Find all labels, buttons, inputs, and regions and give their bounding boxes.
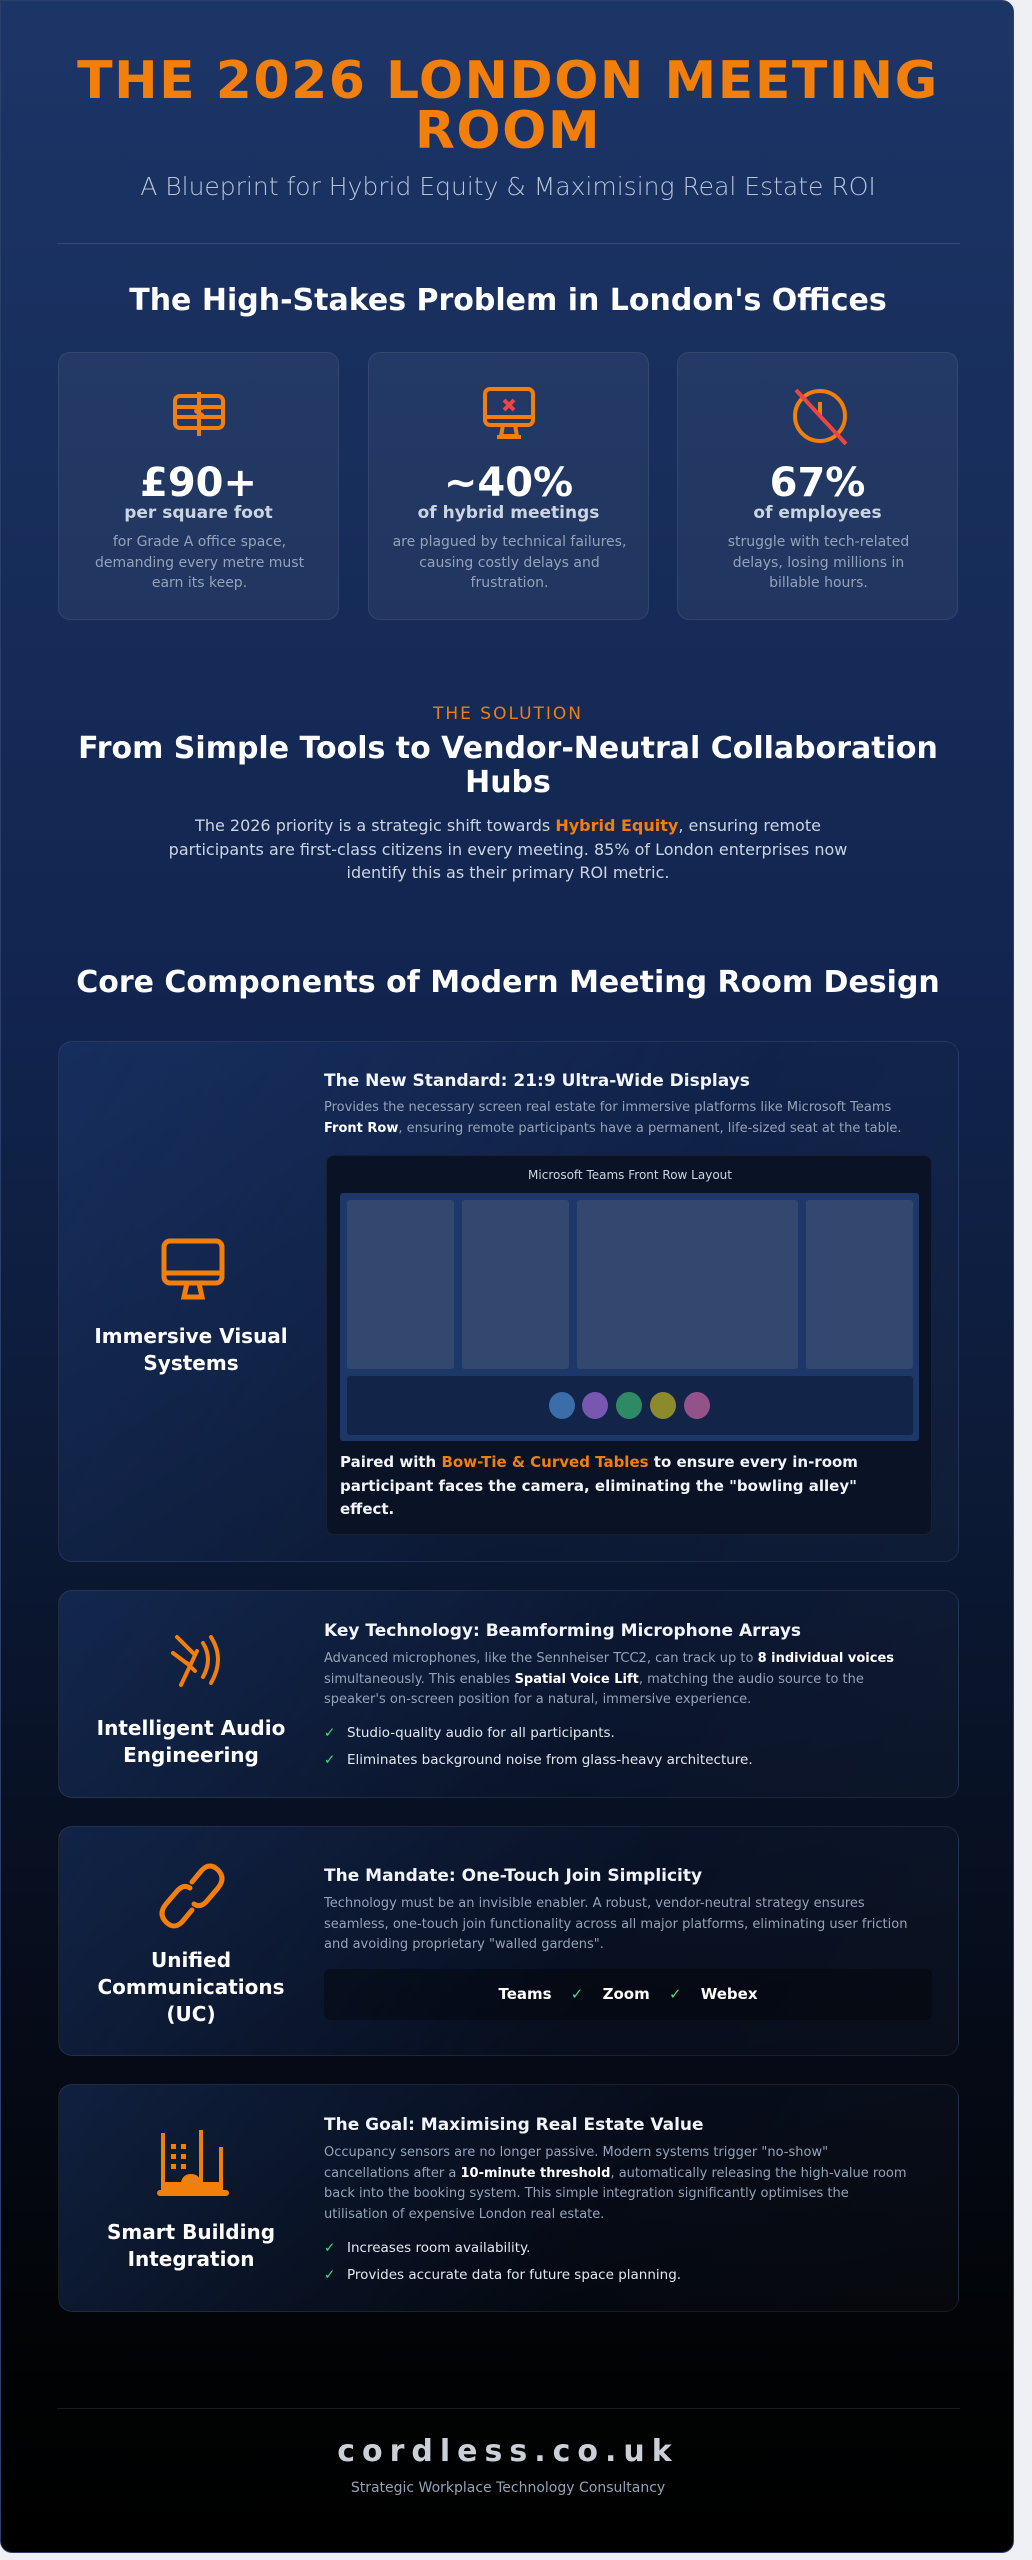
- description: simultaneously. This enables Spatial Voice Lift, matching the audio source to the: [324, 1672, 864, 1686]
- icon: chain link: [159, 1864, 225, 1928]
- solution paragraph: The 2026 priority is a strategic shift towards Hybrid Equity, ensuring remote: [195, 816, 821, 835]
- icon: microphone waves: [170, 1634, 220, 1688]
- checklist: ✓: [324, 2267, 335, 2283]
- label: (UC): [166, 2002, 216, 2026]
- panel: unified communications: [58, 1826, 959, 2056]
- description: Provides the necessary screen real estate for immersive platforms like Microsoft Teams: [324, 1100, 891, 1115]
- description: Advanced microphones, like the Sennheiser TCC2, can track up to 8 individual voices: [324, 1651, 894, 1666]
- description: Occupancy sensors are no longer passive. Modern systems trigger "no-show": [324, 2145, 828, 2160]
- label: [97, 1716, 285, 1767]
- label: Smart Building: [107, 2220, 275, 2244]
- solution paragraph: [169, 816, 847, 882]
- heading: solution: [78, 731, 938, 800]
- icon: building money: [173, 392, 225, 436]
- description: Front Row, ensuring remote participants have a permanent, life-sized seat at the table.: [324, 1120, 902, 1136]
- diagram: front row layout: Microsoft Teams Front Row Layout: [528, 1168, 732, 1182]
- icon: clock crossed: [793, 388, 848, 446]
- heading: The New Standard: 21:9 Ultra-Wide Displays: [324, 1071, 750, 1091]
- heading: The Mandate: One-Touch Join Simplicity: [324, 1866, 702, 1886]
- stat card: meetings: ~40%: [444, 460, 573, 506]
- label: the solution: THE SOLUTION: [433, 704, 583, 724]
- heading: The Goal: Maximising Real Estate Value: [324, 2115, 704, 2135]
- checklist: Eliminates background noise from glass-heavy architecture.: [347, 1752, 753, 1768]
- diagram: front row layout: Paired with Bow-Tie & Curved Tables to ensure every in-room participant faces the camera, eliminating the "bowling alley" effect.: [340, 1453, 858, 1518]
- panel: intelligent audio: [58, 1590, 959, 1798]
- description: cancellations after a 10-minute threshold, automatically releasing the high-value room: [324, 2166, 907, 2180]
- checklist: ✓: [324, 2240, 335, 2256]
- stat card: price: for Grade A office space, demanding every metre must earn its keep.: [95, 534, 304, 591]
- description: [324, 2145, 907, 2222]
- checklist: ✓: [324, 1752, 335, 1768]
- icon: building money: $: [193, 403, 205, 424]
- stat card: employees: of employees: [753, 503, 882, 523]
- stat card: employees: 67%: [770, 460, 865, 506]
- label: [107, 2220, 275, 2271]
- label: Integration: [128, 2247, 254, 2271]
- label: Unified: [151, 1948, 231, 1972]
- solution paragraph: participants are first-class citizens in every meeting. 85% of London enterprises now: [169, 840, 847, 858]
- checklist: Increases room availability.: [347, 2240, 530, 2256]
- checklist: Provides accurate data for future space planning.: [347, 2267, 681, 2283]
- heading: solution: From Simple Tools to Vendor-Neutral Collaboration: [78, 731, 938, 766]
- diagram: front row layout: [326, 1155, 932, 1535]
- title: THE 2026 LONDON MEETING: [77, 51, 939, 111]
- stat card: meetings: are plagued by technical failures, causing costly delays and frustration.: [393, 534, 626, 591]
- heading: problem: The High-Stakes Problem in London's Offices: [129, 283, 887, 318]
- title: ROOM: [415, 101, 601, 161]
- platform strip: [324, 1969, 932, 2020]
- description: seamless, one-touch join functionality across all major platforms, eliminating user friction: [324, 1916, 907, 1932]
- heading: core components: Core Components of Modern Meeting Room Design: [76, 965, 940, 1000]
- label: Engineering: [123, 1743, 259, 1767]
- checklist: [324, 1725, 753, 1768]
- description: [324, 1651, 894, 1707]
- icon: building: [157, 2130, 229, 2196]
- icon: monitor with x: [483, 387, 535, 439]
- description: and avoiding proprietary "walled gardens".: [324, 1937, 604, 1952]
- description: utilisation of expensive London real estate.: [324, 2206, 604, 2222]
- stat card: price: £90+: [140, 460, 257, 506]
- footer brand: cordless.co.uk: [337, 2434, 679, 2469]
- label: Communications: [97, 1975, 285, 1999]
- platform strip: Teams ✓ Zoom ✓ Webex: [498, 1985, 758, 2003]
- solution paragraph: identify this as their primary ROI metric.: [347, 863, 669, 882]
- label: Systems: [143, 1351, 239, 1375]
- title: [77, 51, 939, 161]
- checklist: Studio-quality audio for all participants.: [347, 1725, 615, 1741]
- label: Immersive Visual: [94, 1324, 288, 1348]
- stat card: meetings: of hybrid meetings: [418, 503, 599, 523]
- description: speaker's on-screen position for a natural, immersive experience.: [324, 1692, 751, 1707]
- stat card: employees: [677, 352, 958, 620]
- footer tagline: Strategic Workplace Technology Consultancy: [351, 2480, 665, 2496]
- description: Technology must be an invisible enabler. A robust, vendor-neutral strategy ensures: [324, 1896, 865, 1911]
- description: [324, 1896, 907, 1952]
- panel: immersive visual systems: [58, 1041, 959, 1562]
- subtitle: A Blueprint for Hybrid Equity & Maximising Real Estate ROI: [140, 172, 876, 201]
- stat card: price: per square foot: [124, 503, 273, 523]
- panel: smart building: [58, 2084, 959, 2312]
- heading: solution: Hubs: [465, 765, 551, 800]
- stat card: meetings: [368, 352, 649, 620]
- stat card: price: [58, 352, 339, 620]
- stat card: employees: struggle with tech-related delays, losing millions in billable hours.: [728, 534, 909, 591]
- heading: Key Technology: Beamforming Microphone Arrays: [324, 1621, 801, 1641]
- description: back into the booking system. This simple integration significantly optimises the: [324, 2186, 849, 2201]
- label: [97, 1948, 285, 2026]
- icon: monitor: [162, 1238, 224, 1300]
- checklist: ✓: [324, 1725, 335, 1741]
- description: [324, 1100, 902, 1136]
- label: [94, 1324, 288, 1375]
- checklist: [324, 2240, 681, 2283]
- label: Intelligent Audio: [97, 1716, 285, 1740]
